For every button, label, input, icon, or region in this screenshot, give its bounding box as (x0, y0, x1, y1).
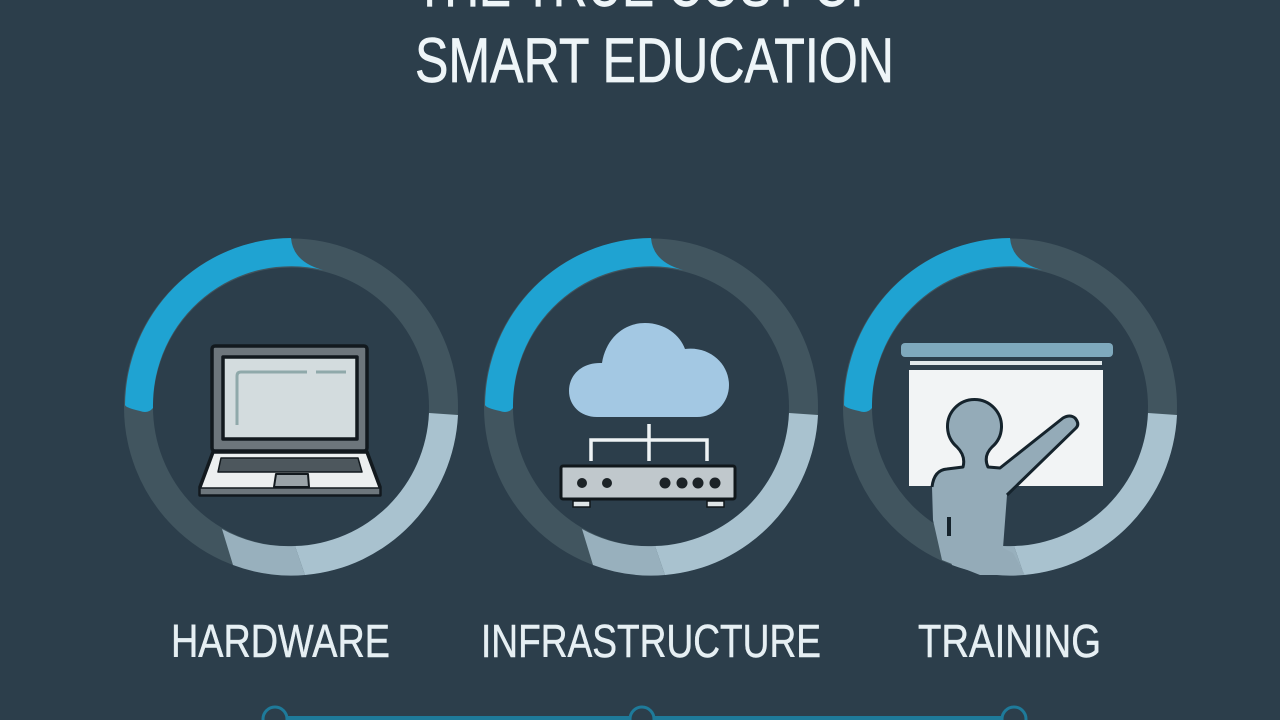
icon: network connectors (591, 424, 707, 461)
icon: laptop (200, 346, 380, 495)
icon: teacher pointing (932, 399, 1078, 575)
panel: hardware (125, 238, 458, 667)
panel: training (844, 238, 1177, 667)
label: training: TRAINING (918, 615, 1101, 667)
icon: projector screen (901, 343, 1113, 486)
title: SMART EDUCATION (415, 26, 894, 96)
icon: cloud (569, 323, 729, 417)
icon: router (561, 466, 735, 507)
label: infrastructure: INFRASTRUCTURE (481, 615, 821, 667)
panel: infrastructure (481, 238, 821, 667)
ring chart: infrastructure (485, 238, 818, 576)
title (415, 0, 894, 96)
ring chart: hardware (125, 238, 458, 576)
ring chart: training (844, 238, 1177, 576)
label: hardware: HARDWARE (171, 615, 390, 667)
timeline (263, 707, 1026, 720)
